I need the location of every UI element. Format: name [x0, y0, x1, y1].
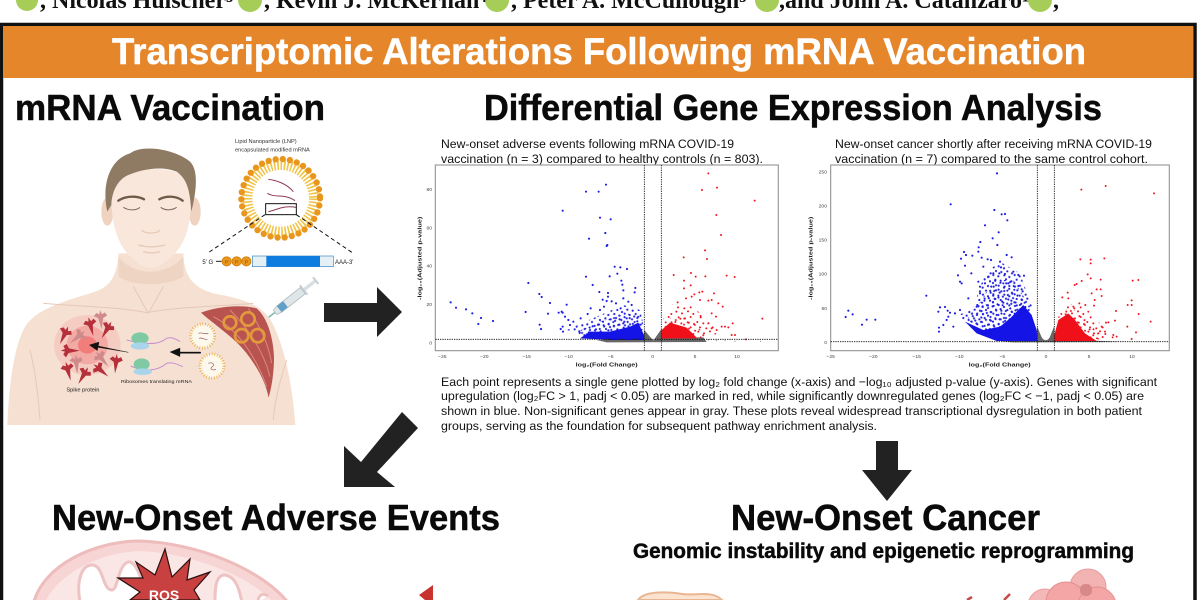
axis ticks: 10 — [1129, 354, 1135, 360]
dense upregulated cluster — [1054, 313, 1097, 341]
dense downregulated cluster — [965, 305, 1037, 341]
ears — [101, 198, 113, 226]
axis ticks: 0 — [651, 354, 654, 360]
explanatory text — [441, 375, 1158, 433]
grey stray points — [708, 339, 761, 341]
axis ticks: −15 — [912, 354, 921, 360]
arrow: to adverse events — [344, 412, 418, 487]
explanatory text: Each point represents a single gene plotted by log₂ fold change (x-axis) and −log₁₀ adjusted p-value (y-axis). Genes with significant — [441, 375, 1158, 389]
thresholds — [831, 165, 1169, 351]
torso — [7, 253, 295, 425]
axis ticks: −25 — [826, 354, 835, 360]
hair — [105, 148, 196, 212]
author line — [16, 0, 1059, 14]
illustration: tumor cells — [967, 569, 1116, 600]
heading: Differential Gene Expression Analysis: Differential Gene Expression Analysis — [484, 87, 1102, 128]
syringe — [265, 275, 320, 322]
axis ticks: 10 — [734, 354, 740, 360]
axis ticks: −20 — [869, 354, 878, 360]
label: ribosomes translating mRNA: Ribosomes translating mRNA — [121, 379, 193, 385]
heading: mRNA Vaccination: mRNA Vaccination — [15, 87, 325, 128]
medium-density downregulated scatter — [567, 305, 644, 338]
axis ticks: −15 — [522, 354, 531, 360]
volcano plot: cancer: 200 — [819, 203, 827, 209]
downregulated points — [451, 185, 635, 332]
volcano plot: cancer: 0 — [824, 340, 827, 346]
volcano plot: adverse events: 0 — [429, 340, 432, 346]
upregulated points — [1062, 186, 1154, 339]
volcano plot: adverse events: 80 — [426, 187, 432, 193]
volcano plot: adverse events: -log₁₀(Adjusted p-value) — [417, 216, 423, 300]
axis ticks — [438, 354, 740, 360]
volcano plot: adverse events: 40 — [426, 264, 432, 270]
translation arrows — [89, 342, 201, 357]
axis ticks: 0 — [1045, 354, 1048, 360]
volcano plot: adverse events — [417, 165, 778, 369]
volcano plot: adverse events: 60 — [426, 225, 432, 231]
axis ticks — [826, 354, 1135, 360]
dense upregulated cluster — [662, 323, 697, 338]
volcano plot: cancer — [809, 165, 1169, 369]
title banner: Transcriptomic Alterations Following mRNA Vaccination — [112, 31, 1086, 72]
ribosomes — [127, 332, 183, 375]
volcano plot: cancer: 50 — [821, 306, 827, 312]
medium-density upregulated scatter — [663, 303, 720, 338]
axis ticks: −5 — [608, 354, 614, 360]
volcano plot: adverse events: 20 — [426, 302, 432, 308]
dense downregulated cluster — [580, 323, 645, 340]
axis ticks: −5 — [999, 354, 1005, 360]
explanatory text: groups, serving as the foundation for subsequent pathway enrichment analysis. — [441, 419, 877, 433]
explanatory text: upregulation (log₂FC > 1, padj < 0.05) are marked in red, while significantly downregulated genes (log₂FC < −1, padj < 0.05) are — [441, 389, 1144, 403]
caption: cancer: vaccination (n = 7) compared to the same control cohort. — [835, 152, 1148, 166]
illustration: tissue — [638, 592, 722, 600]
red arrow fragment — [419, 585, 433, 600]
illustration: mitochondrion with ROS — [33, 541, 290, 600]
lipid nanoparticle diagram: P — [235, 259, 239, 265]
lipid nanoparticle diagram: Lipid Nanoparticle (LNP) — [235, 139, 297, 145]
deltoid muscle — [201, 306, 274, 398]
spike proteins — [54, 316, 123, 387]
ROS burst — [118, 549, 210, 600]
title banner — [3, 26, 1193, 78]
caption: adverse events: New-onset adverse events following mRNA COVID-19 — [441, 137, 734, 151]
lipid nanoparticle diagram: 5' G — [202, 260, 213, 266]
axis ticks: −10 — [955, 354, 964, 360]
downregulated points — [846, 173, 1024, 332]
illustration: vaccinated person — [7, 148, 320, 425]
heading: New-Onset Adverse Events: New-Onset Adverse Events — [52, 497, 500, 538]
inflammation glow — [54, 315, 121, 375]
medium-density upregulated scatter — [1055, 303, 1115, 339]
axis ticks: −10 — [564, 354, 573, 360]
arrow: to cancer — [862, 441, 912, 501]
axis ticks: 5 — [694, 354, 697, 360]
face — [111, 169, 191, 268]
volcano plot: cancer: 100 — [819, 272, 827, 278]
lipid nanoparticle diagram: encapsulated modified mRNA — [235, 148, 310, 154]
brows and eyes — [118, 197, 183, 201]
axis ticks: −25 — [438, 354, 447, 360]
caption: adverse events: vaccination (n = 3) compared to healthy controls (n = 803). — [441, 152, 763, 166]
volcano plot: cancer: 250 — [819, 169, 827, 175]
lipid nanoparticle diagram: P — [245, 259, 249, 265]
LNPs in cell — [191, 324, 224, 378]
upregulated points — [674, 173, 762, 339]
non-significant points — [1000, 327, 1123, 342]
axis labels: log₂(Fold Change) — [969, 363, 1031, 369]
axis ticks: −20 — [480, 354, 489, 360]
volcano plot: cancer: -log₁₀(Adjusted p-value) — [809, 216, 815, 300]
lipid nanoparticle diagram: AAA-3' — [335, 260, 353, 266]
caption: adverse events — [441, 137, 763, 166]
subheading: cancer: Genomic instability and epigenetic reprogramming — [633, 540, 1134, 563]
lipid nanoparticle diagram — [202, 139, 353, 267]
caption: cancer — [835, 137, 1152, 166]
medium-density downregulated scatter — [957, 262, 1033, 330]
heading: New-Onset Cancer: New-Onset Cancer — [731, 497, 1040, 538]
explanatory text: shown in blue. Non-significant genes appear in gray. These plots reveal widespread transcriptional dysregulation in both patient — [441, 404, 1143, 418]
lipid nanoparticle diagram: P — [225, 259, 229, 265]
label: spike protein: Spike protein — [66, 388, 99, 394]
thresholds — [435, 165, 778, 351]
arrow: vaccination to analysis — [324, 287, 402, 337]
axis ticks: 5 — [1088, 354, 1091, 360]
volcano plot: cancer: 150 — [819, 238, 827, 244]
non-significant points — [597, 329, 707, 342]
caption: cancer: New-onset cancer shortly after receiving mRNA COVID-19 — [835, 137, 1152, 151]
axis labels: log₂(Fold Change) — [576, 363, 638, 369]
